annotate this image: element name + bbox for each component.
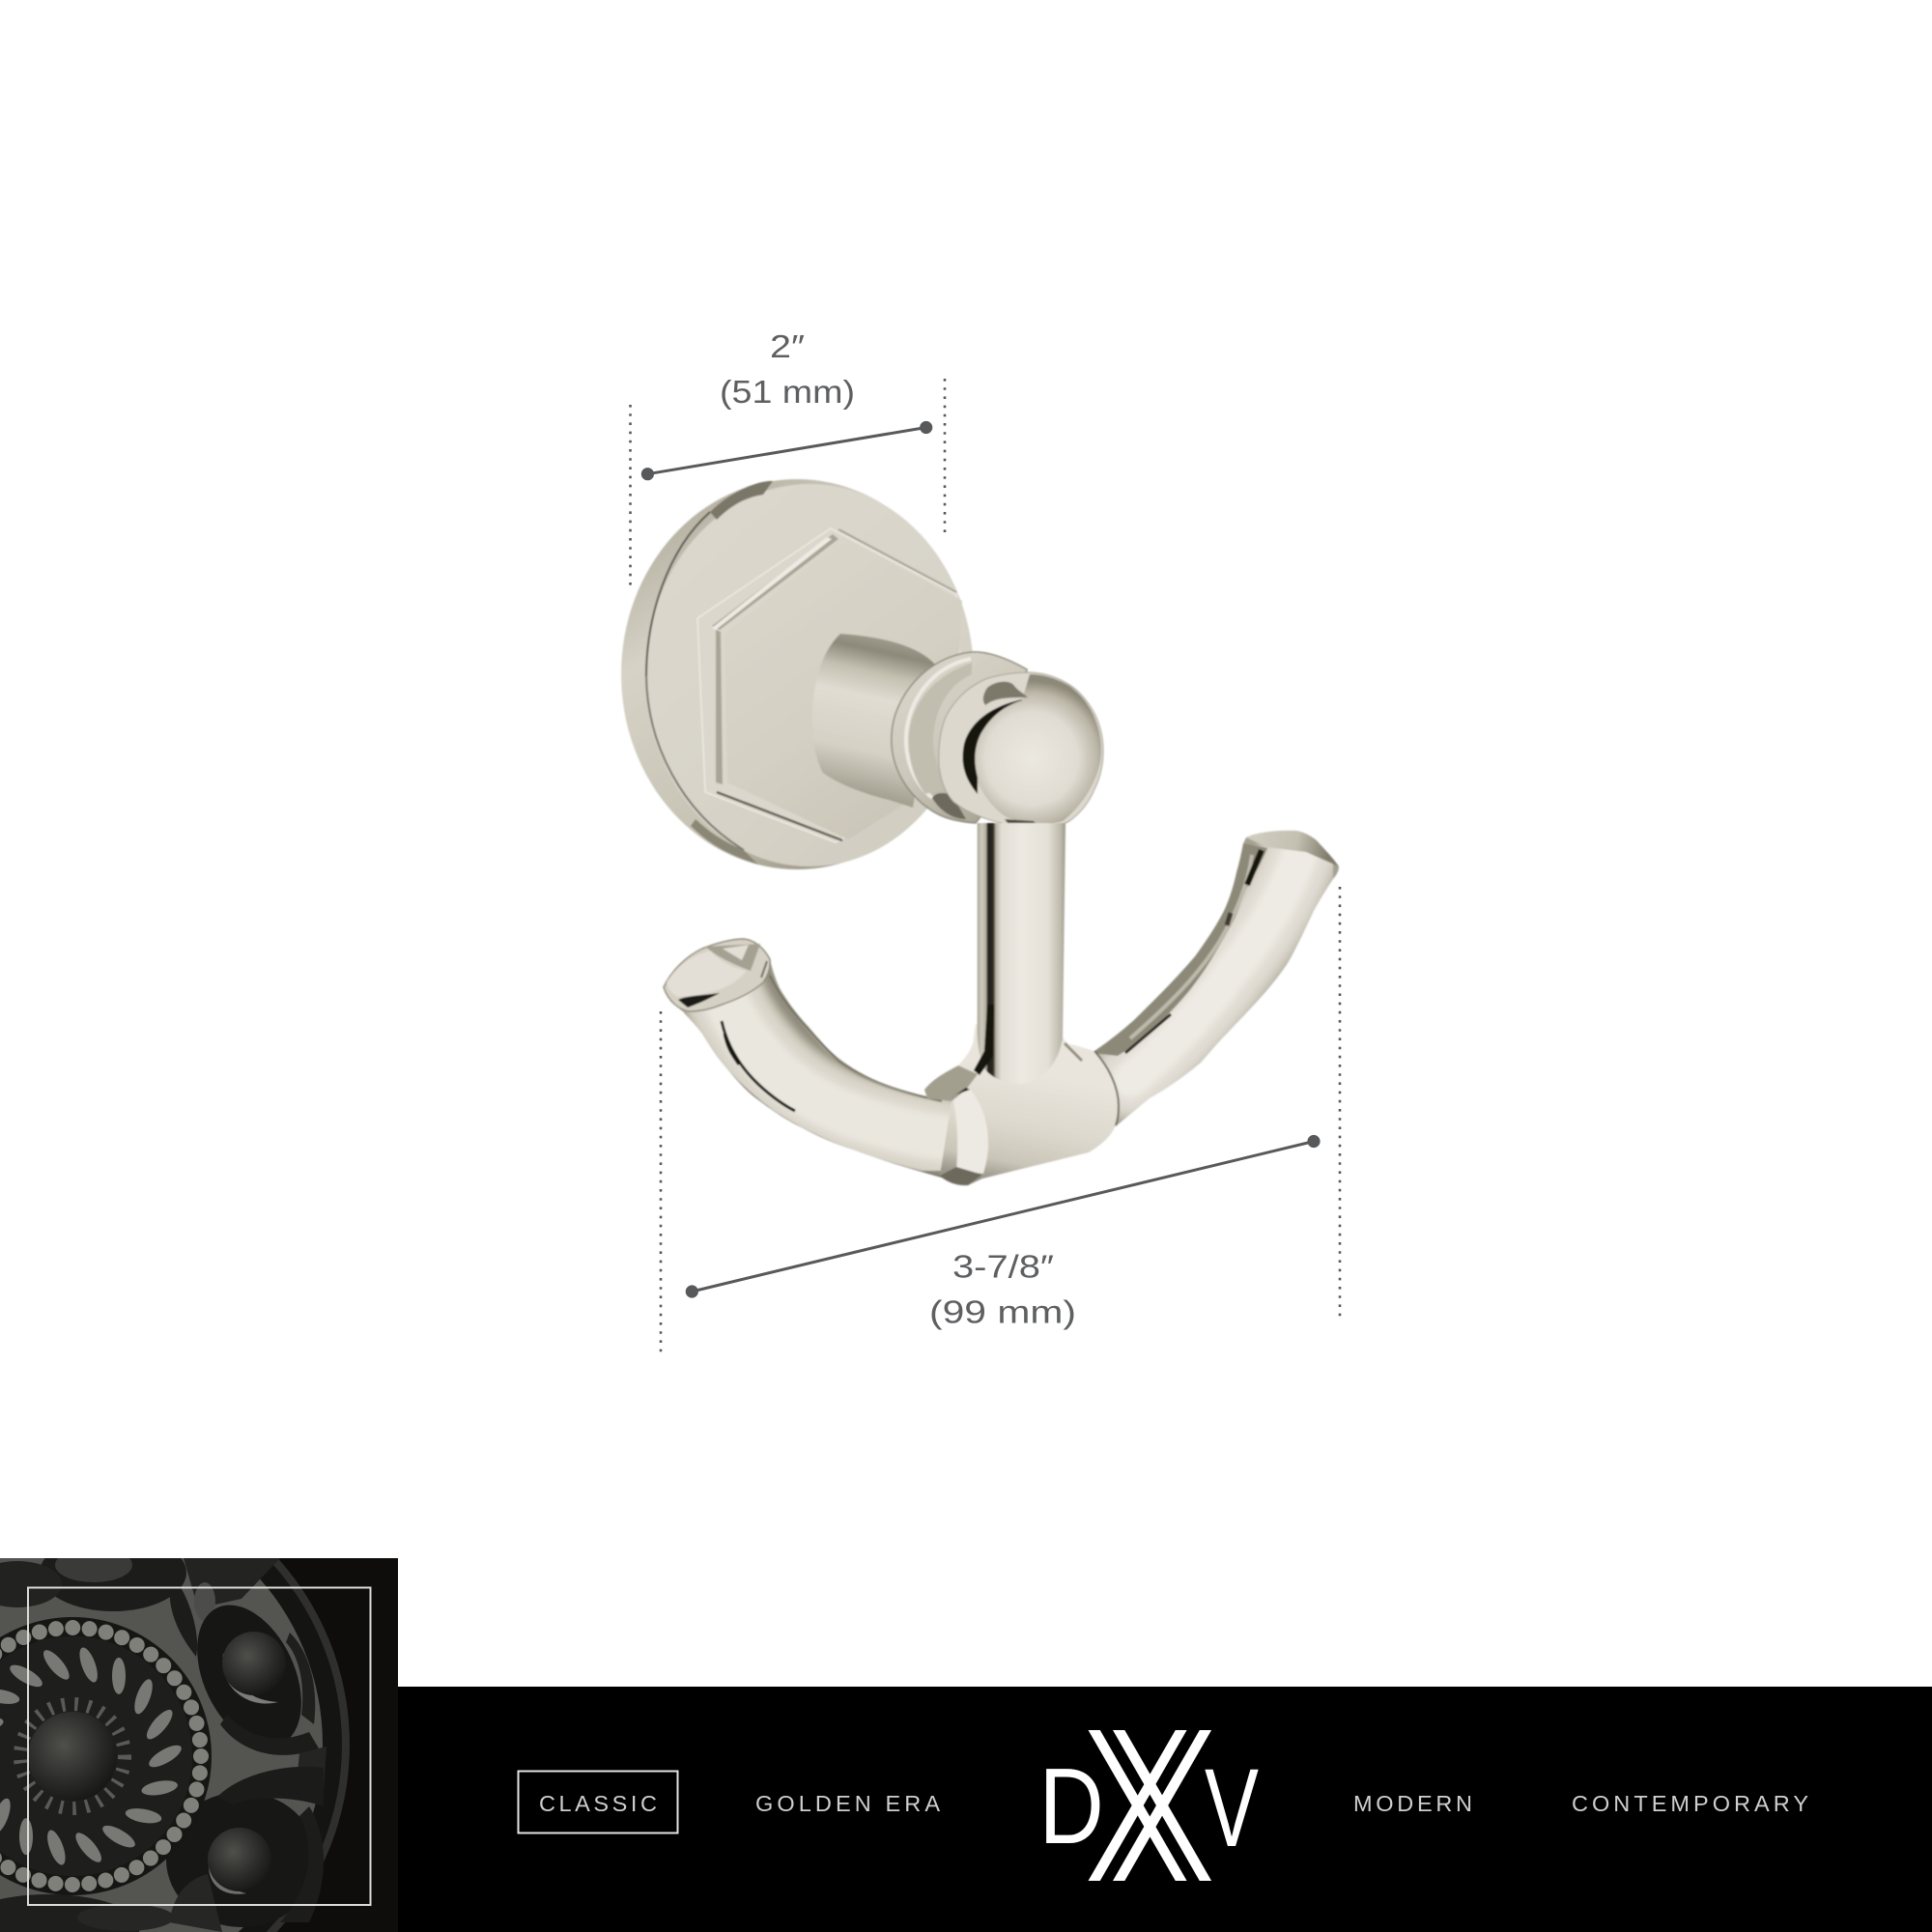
label: 3-7/8 in / 99 mm: (99 mm) [929,1294,1076,1330]
active style: CLASSIC: CLASSIC [539,1791,657,1816]
style: GOLDEN ERA: GOLDEN ERA [755,1791,940,1816]
collar ring [892,652,1027,823]
label: 3-7/8 in / 99 mm: 3-7/8″ [952,1249,1054,1285]
wall plate [621,479,974,869]
medallion rim [0,1558,350,1932]
label: 3-7/8 in / 99 mm [929,1249,1076,1330]
measure line with end dots [686,1135,1321,1298]
right tip top face [1246,831,1339,867]
logo letter V: V [1205,1747,1259,1870]
right hook arm [1094,830,1340,1127]
dimension: projection 3-7/8 in [661,887,1340,1357]
top scroll [0,1558,280,1657]
mounting post [812,634,937,808]
bottom left scroll [0,1894,174,1932]
measure line with end dots [641,421,932,480]
logo crossed X strands [1088,1730,1211,1881]
left hook arm [679,963,952,1179]
upper right rosette [197,1605,327,1787]
left hook tip cap [664,939,770,1011]
vertical arm [978,823,1065,1084]
logo letter D: D [1039,1746,1104,1866]
left arm shading lines [683,959,952,1180]
style: CONTEMPORARY: CONTEMPORARY [1572,1791,1808,1816]
label: 2 in / 51 mm: (51 mm) [720,374,855,410]
hub junction [924,1024,1119,1185]
hexagonal raised escutcheon [697,528,962,842]
active style: CLASSIC [518,1772,678,1833]
extension lines [661,887,1340,1357]
label: 2 in / 51 mm [720,328,855,410]
product illustration: double robe hook [621,479,1352,1188]
lower right rosette and leaves [166,1767,324,1932]
central dome with rays [20,1704,125,1808]
ornamental medallion photo panel [0,1558,398,1932]
medallion frame [28,1588,371,1905]
ball knob [939,672,1103,828]
extension lines [630,379,945,586]
leaf wreath [0,1645,185,1867]
style: MODERN: MODERN [1353,1791,1472,1816]
right arm reflection band [1092,843,1267,1056]
style timeline navigation [518,1730,1808,1881]
arm base flare reflection [974,1005,994,1075]
DXV logo [1039,1730,1259,1881]
footer black band [398,1687,1932,1932]
dimension: width 2 in [630,328,945,586]
beaded ring [0,1627,202,1886]
label: 2 in / 51 mm: 2″ [770,328,805,364]
